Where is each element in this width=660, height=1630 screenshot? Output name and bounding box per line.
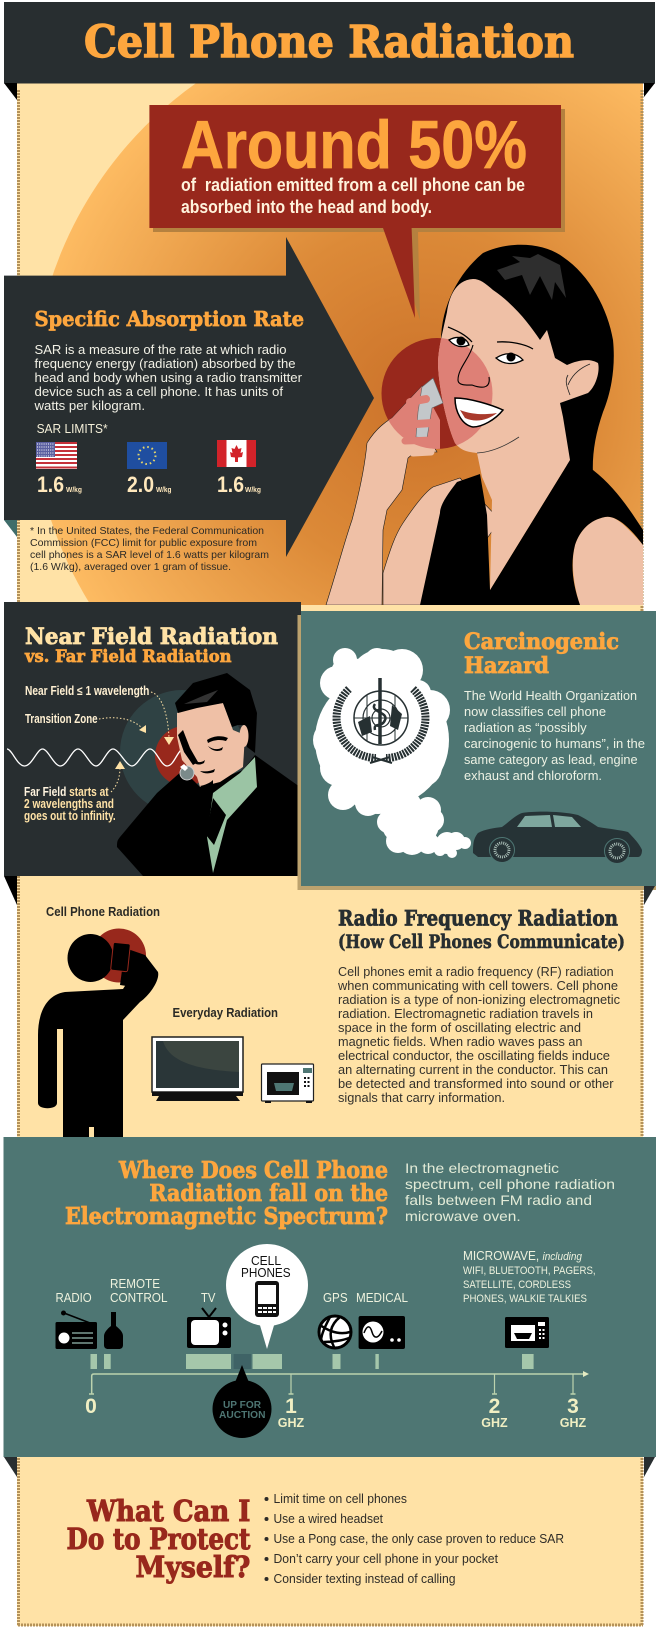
SAR values: 1.6	[217, 472, 244, 497]
icon: mobile phone	[255, 1281, 279, 1317]
spectrum labels	[56, 1248, 596, 1305]
SAR values: W/kg	[245, 487, 261, 494]
description: head and body when using a radio transmitter	[34, 371, 302, 385]
smoke cloud	[313, 648, 471, 858]
spectrum labels: TV	[201, 1290, 216, 1305]
near field circle	[155, 726, 215, 786]
fingers	[400, 399, 433, 453]
label: everyday radiation: Everyday Radiation	[172, 1005, 278, 1020]
hair	[441, 245, 614, 475]
SAR limits label: SAR LIMITS*	[37, 422, 108, 436]
shirt collar	[207, 757, 257, 873]
panel: near field vs far field	[4, 602, 301, 905]
panel: electromagnetic spectrum	[4, 1137, 656, 1477]
callout: cell phones bubble: CELL	[251, 1253, 281, 1268]
red radiation circle	[382, 338, 457, 449]
spectrum labels: CONTROL	[110, 1290, 168, 1305]
icon: television	[152, 1037, 243, 1101]
heading: Carcinogenic	[464, 629, 619, 655]
panel: near field vs far field: Transition Zone	[25, 712, 98, 726]
SAR values: W/kg	[66, 487, 82, 494]
spectrum labels: GPS	[323, 1290, 348, 1305]
icon: microwave oven	[505, 1317, 549, 1348]
spectrum labels: RADIO	[56, 1290, 92, 1305]
description: spectrum, cell phone radiation	[405, 1176, 615, 1192]
callout: around 50% speech bubble: absorbed into the head and body.	[181, 196, 432, 217]
heading: Do to Protect	[66, 1522, 251, 1556]
spectrum labels: REMOTE	[110, 1276, 160, 1291]
title banner	[4, 2, 655, 100]
tips list: Use a Pong case, the only case proven to reduce SAR	[274, 1531, 564, 1546]
description: magnetic fields. When radio waves pass an	[338, 1034, 582, 1049]
man	[117, 673, 300, 876]
description: signals that carry information.	[338, 1090, 505, 1105]
icon: remote control	[104, 1312, 123, 1349]
footnote text: cell phones is a SAR level of 1.6 watts per kilogram	[30, 549, 269, 561]
tips list: Use a wired headset	[274, 1511, 383, 1526]
callout: cell phones bubble	[226, 1244, 308, 1349]
description: SAR is a measure of the rate at which radio	[34, 343, 287, 357]
tips list: Consider texting instead of calling	[274, 1571, 456, 1586]
description: device such as a cell phone. It has units of	[34, 385, 284, 399]
heading	[65, 1157, 388, 1230]
icon: microwave	[262, 1064, 314, 1103]
description: electrical conductor, the oscillating fields induce	[338, 1048, 610, 1063]
description: radiation. Electromagnetic radiation travels in	[338, 1006, 593, 1021]
axis numbers: 2	[489, 1395, 500, 1418]
description: exhaust and chloroform.	[464, 768, 602, 783]
hair	[175, 673, 257, 753]
callout: around 50% speech bubble	[149, 105, 565, 320]
icon: person on phone	[38, 928, 158, 1137]
panel: hero background gradient circle	[51, 84, 643, 605]
callout: around 50% speech bubble: Around 50%	[181, 107, 527, 183]
panel: radio frequency radiation	[38, 904, 625, 1137]
axis numbers: 1	[285, 1395, 297, 1418]
description: microwave oven.	[405, 1208, 521, 1224]
callout: up for auction: AUCTION	[219, 1410, 266, 1421]
wave	[7, 749, 181, 766]
description	[464, 688, 645, 783]
radiation overlay on skin	[382, 338, 492, 449]
callout: up for auction	[212, 1365, 272, 1438]
heading: Radio Frequency Radiation	[338, 906, 618, 932]
panel: near field vs far field: Far Field starts at	[24, 785, 109, 799]
callout: up for auction: UP FOR	[223, 1400, 262, 1411]
panel: near field vs far field: vs. Far Field Radiation	[24, 647, 231, 667]
spectrum labels: MEDICAL	[356, 1290, 408, 1305]
frequency axis	[89, 1371, 589, 1394]
head	[177, 703, 245, 787]
illustration: woman on phone	[326, 245, 643, 605]
heading: Radiation fall on the	[149, 1180, 388, 1207]
labels: Near Field ≤ 1 wavelength	[25, 684, 149, 698]
description: carcinogenic to humans”, in the	[464, 736, 645, 751]
SAR values	[37, 472, 261, 497]
axis numbers: 0	[85, 1395, 97, 1418]
SAR values: 1.6	[37, 472, 64, 497]
tips list	[264, 1491, 564, 1586]
description: an alternating current in the conductor. This can	[338, 1062, 608, 1077]
heading: Electromagnetic Spectrum?	[65, 1203, 388, 1230]
description: radiation as “possibly	[464, 720, 587, 735]
description	[33, 343, 302, 413]
description: radiation is a type of non-ionizing electromagnetic	[338, 992, 620, 1007]
heading: Where Does Cell Phone	[118, 1157, 388, 1184]
heading: Near Field Radiation	[25, 624, 278, 650]
description: In the electromagnetic	[405, 1160, 559, 1176]
heading: Myself?	[136, 1550, 250, 1584]
callout: around 50% speech bubble: of radiation emitted from a cell phone can be	[181, 174, 525, 195]
transition zone circle	[120, 690, 244, 814]
axis numbers	[85, 1395, 587, 1430]
description: The World Health Organization	[464, 688, 637, 703]
description: space in the form of oscillating electric and	[338, 1020, 581, 1035]
icon: radio	[56, 1310, 97, 1349]
axis numbers: 3	[567, 1395, 579, 1418]
face and neck	[438, 279, 599, 590]
description: when communicating with cell towers. Cell phone	[337, 978, 618, 993]
footnote text: Commission (FCC) limit for public exposure from	[30, 537, 257, 549]
raised forearm and hand	[326, 386, 437, 605]
arm and shoulders	[383, 478, 500, 605]
icon: car	[473, 812, 642, 864]
description: watts per kilogram.	[33, 399, 145, 413]
description: same category as lead, engine	[464, 752, 638, 767]
description: falls between FM radio and	[405, 1192, 592, 1208]
spectrum labels: SATELLITE, CORDLESS	[463, 1279, 571, 1291]
phone	[416, 378, 443, 438]
panel: specific absorption rate arrow	[4, 237, 374, 557]
description	[405, 1160, 615, 1224]
dotted arrows	[99, 692, 174, 792]
callout: cell phones bubble: PHONES	[241, 1265, 291, 1280]
icon: WHO emblem	[337, 678, 425, 763]
spectrum labels: MICROWAVE, including	[463, 1248, 583, 1263]
heading	[66, 1494, 251, 1584]
panel: what can I do	[66, 1491, 564, 1586]
flag: EU	[127, 442, 167, 469]
jacket	[117, 755, 300, 876]
label: cell phone radiation: Cell Phone Radiation	[46, 904, 160, 919]
spectrum labels: PHONES, WALKIE TALKIES	[463, 1293, 587, 1305]
spectrum bars	[90, 1354, 534, 1369]
description: be detected and transformed into sound or other	[338, 1076, 614, 1091]
description	[337, 964, 620, 1105]
icon: medical monitor	[359, 1316, 405, 1349]
heading: What Can I	[86, 1494, 250, 1528]
panel: carcinogenic hazard: Hazard	[464, 653, 549, 679]
icon: television small	[187, 1308, 231, 1348]
axis numbers: GHZ	[560, 1416, 587, 1430]
black dress	[420, 460, 643, 605]
title banner: Cell Phone Radiation	[84, 17, 574, 68]
panel: near field vs far field: goes out to infinity.	[24, 809, 116, 823]
panel: carcinogenic hazard	[298, 611, 656, 905]
tips list: Don’t carry your cell phone in your pocket	[274, 1551, 498, 1566]
footnote text: * In the United States, the Federal Communication	[30, 525, 264, 537]
SAR values: 2.0	[127, 472, 154, 497]
footnote text: (1.6 W/kg), averaged over 1 gram of tissue.	[30, 561, 231, 573]
description: now classifies cell phone	[464, 704, 606, 719]
icon: globe	[319, 1316, 351, 1348]
footnote text	[30, 525, 269, 573]
phone	[180, 766, 194, 780]
facial features	[449, 337, 523, 364]
panel: near field vs far field: 2 wavelengths and	[24, 797, 114, 811]
flag: Canada	[217, 440, 256, 467]
description: frequency energy (radiation) absorbed by the	[34, 357, 296, 371]
flag: USA	[36, 442, 77, 469]
axis numbers: GHZ	[481, 1416, 508, 1430]
description: Cell phones emit a radio frequency (RF) radiation	[338, 964, 614, 979]
spectrum labels: WIFI, BLUETOOTH, PAGERS,	[463, 1265, 596, 1277]
ear	[240, 725, 248, 747]
tips list: Limit time on cell phones	[274, 1491, 407, 1506]
axis numbers: GHZ	[278, 1416, 305, 1430]
heading: Specific Absorption Rate	[34, 307, 304, 331]
SAR values: W/kg	[156, 487, 172, 494]
